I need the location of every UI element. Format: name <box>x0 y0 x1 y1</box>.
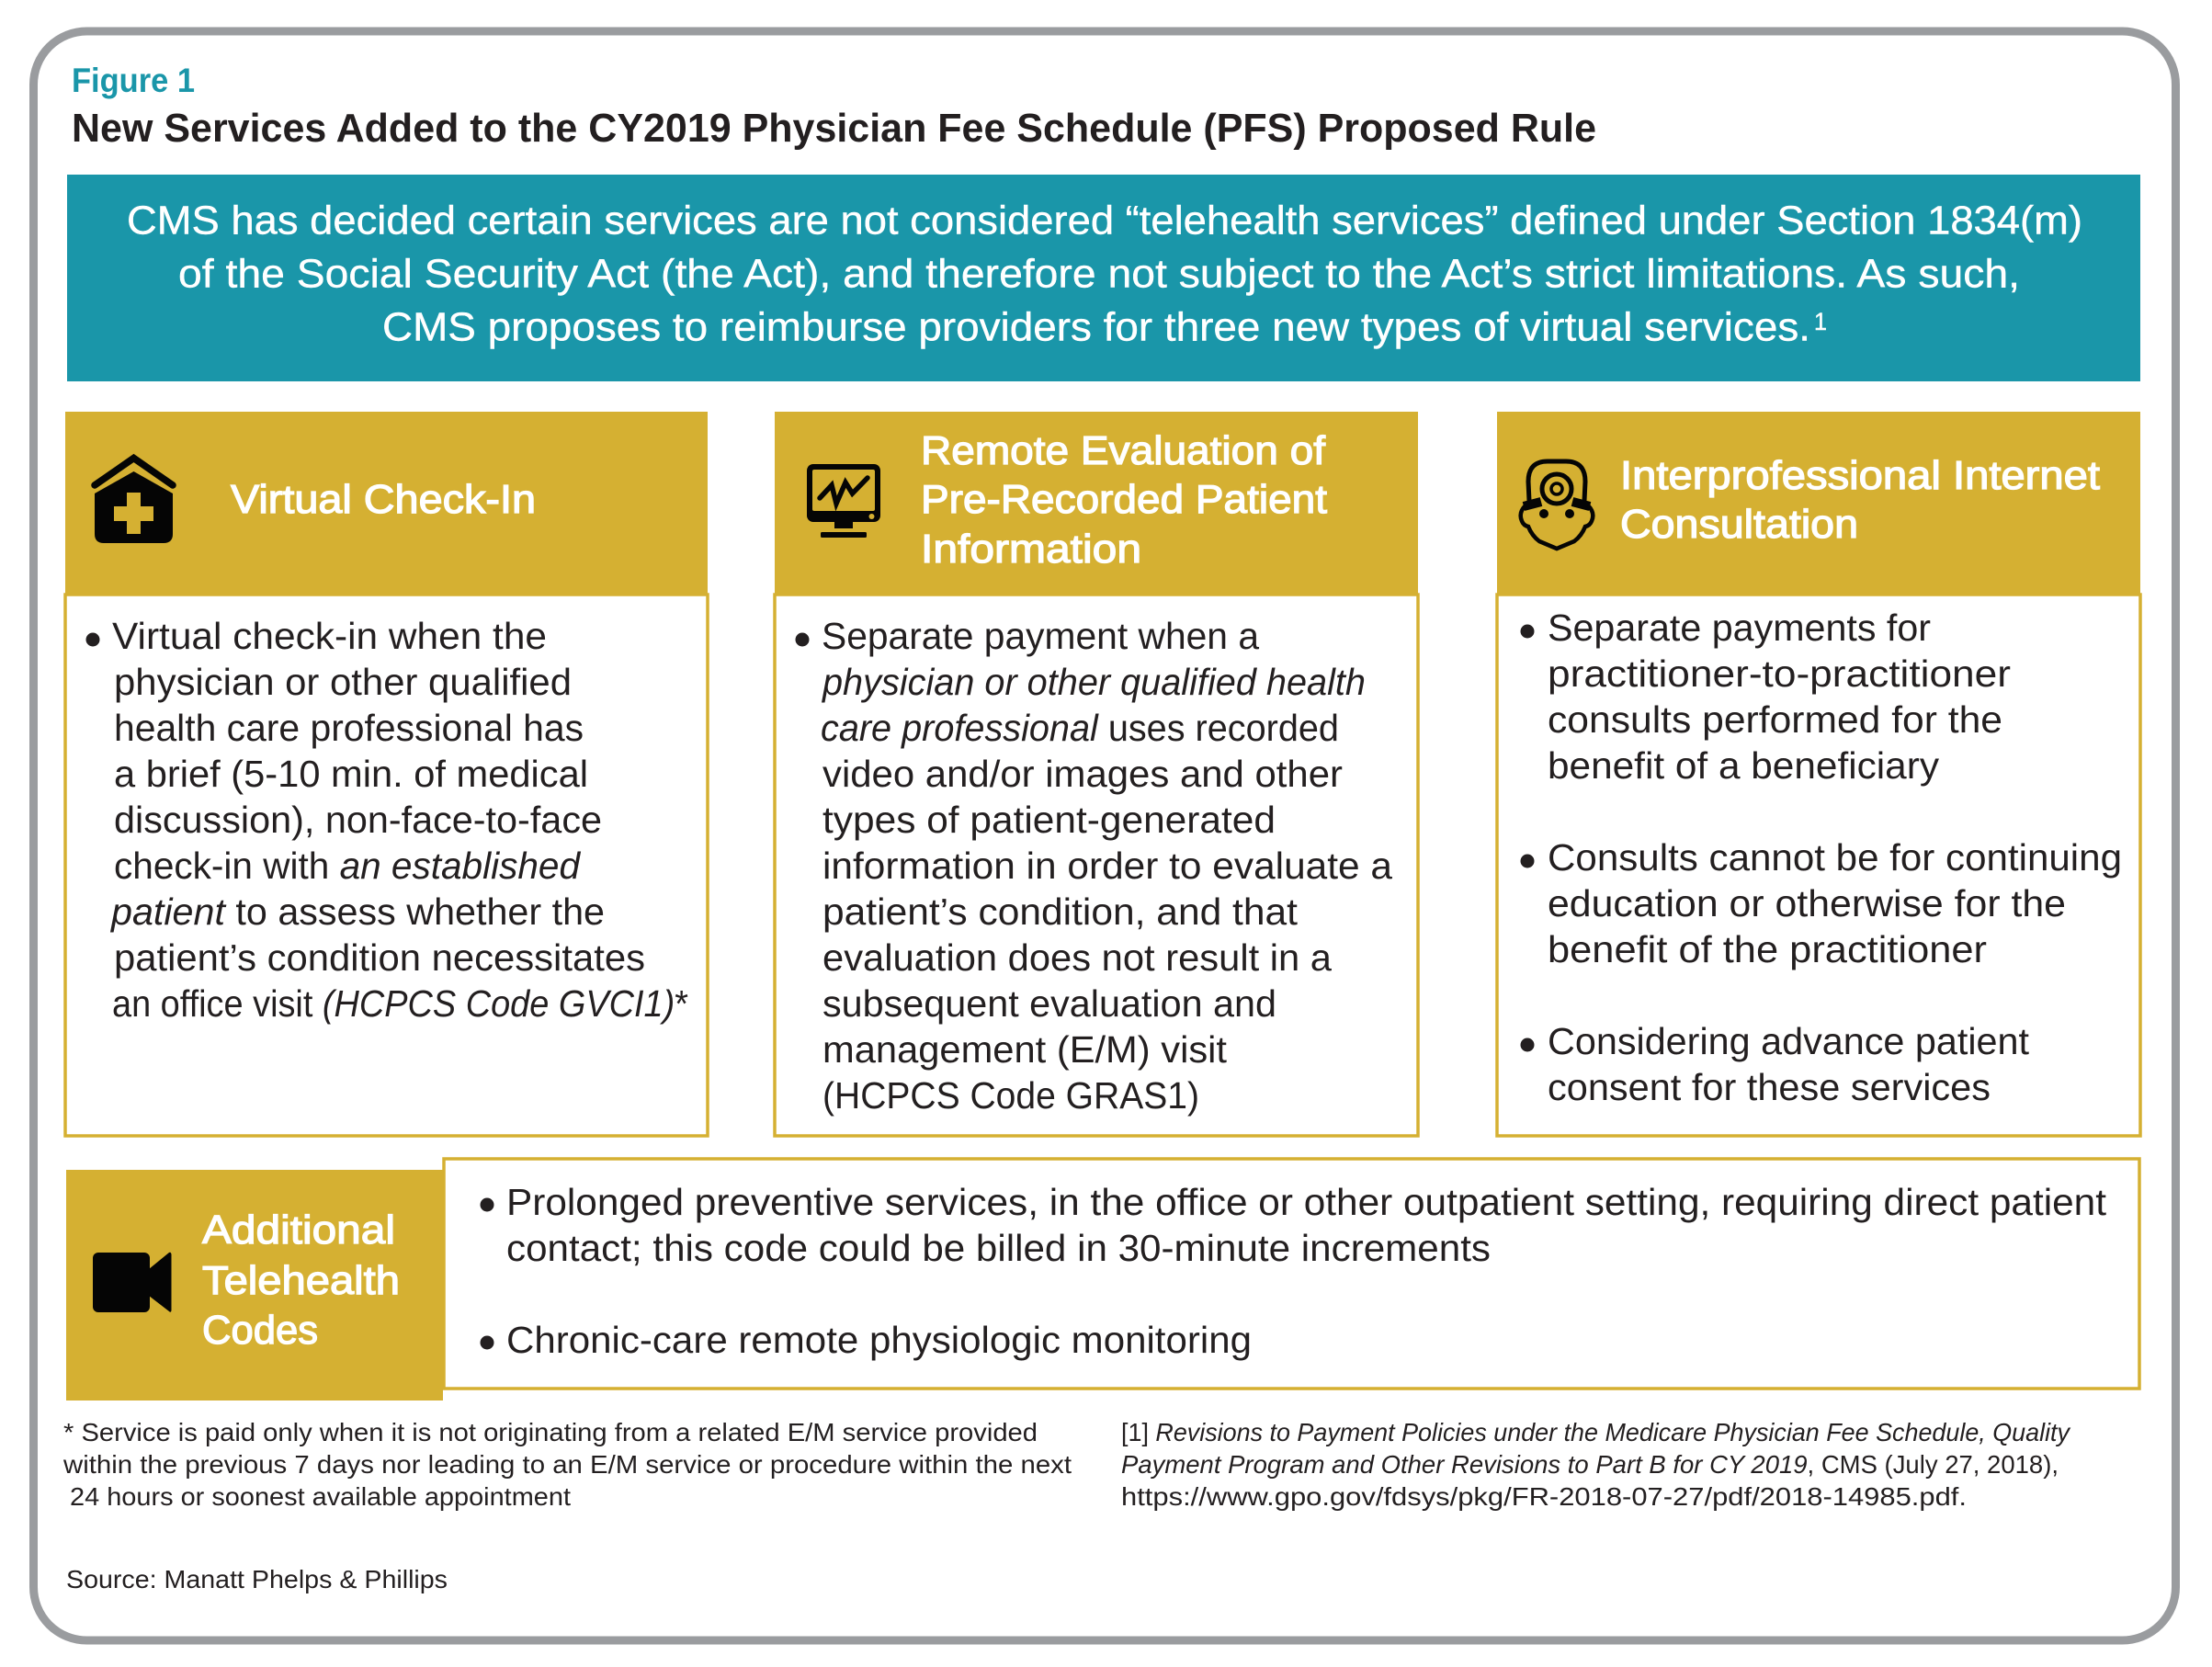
footnote: reference 1: [1] Revisions to Payment Policies under the Medicare Physician Fee Schedule, Quality <box>1121 1418 2071 1446</box>
column header bar <box>65 412 708 594</box>
bullet text: types of patient-generated <box>822 799 1276 841</box>
bullet text: Separate payment when a <box>822 615 1259 657</box>
panel: teal summary banner: CMS has decided certain services are not considered “telehealth services” defined under Section 1834(m) <box>127 198 2082 243</box>
icon: doctor with head mirror <box>1521 461 1593 549</box>
column header bar <box>775 412 1418 594</box>
bullet text: consent for these services <box>1548 1066 1991 1108</box>
footnote: asterisk note: 24 hours or soonest available appointment <box>70 1482 571 1511</box>
bullet text: evaluation does not result in a <box>822 936 1332 979</box>
column header bar <box>1497 412 2140 594</box>
additional codes bullets <box>480 1181 2107 1361</box>
bullet text: physician or other qualified health <box>821 661 1366 703</box>
bullet text: patient’s condition necessitates <box>114 936 645 979</box>
bullet text <box>86 615 688 1025</box>
footnote: reference 1 <box>1121 1418 2071 1511</box>
bullet text: video and/or images and other <box>822 753 1343 795</box>
figure label: Figure 1 <box>72 62 195 99</box>
bullet text: management (E/M) visit <box>822 1028 1228 1071</box>
bullet text: health care professional has <box>114 707 584 749</box>
bullet text: discussion), non-face-to-face <box>114 799 602 841</box>
bullet text: physician or other qualified <box>114 661 572 703</box>
bullet text: benefit of a beneficiary <box>1548 744 1940 787</box>
bullet text: patient to assess whether the <box>109 890 605 933</box>
bullet text: a brief (5-10 min. of medical <box>114 753 588 795</box>
additional codes header <box>66 1170 443 1401</box>
panel: Remote Evaluation <box>775 412 1418 1136</box>
bullet text: Separate payments for <box>1548 607 1931 649</box>
panel: teal summary banner: of the Social Security Act (the Act), and therefore not subject to the Act’s strict limitations. As such, <box>178 252 2020 296</box>
additional codes heading <box>202 1208 400 1353</box>
panel: Additional Telehealth Codes <box>66 1159 2139 1401</box>
additional codes bullets: Prolonged preventive services, in the office or other outpatient setting, requiring direct patient <box>506 1181 2107 1223</box>
additional codes text box <box>444 1159 2139 1389</box>
bullet text: subsequent evaluation and <box>822 982 1276 1025</box>
column heading: Interprofessional Internet <box>1620 453 2100 498</box>
bullet text: check-in with an established <box>114 845 581 887</box>
icon: house with medical cross <box>95 458 173 543</box>
bullet text: information in order to evaluate a <box>822 845 1392 887</box>
icon: monitor with chart line <box>807 464 880 538</box>
column heading: Consultation <box>1620 502 1858 547</box>
column heading: Information <box>921 527 1141 572</box>
bullet text: an office visit (HCPCS Code GVCI1)* <box>112 982 688 1025</box>
additional codes bullets: Chronic-care remote physiologic monitoring <box>506 1319 1252 1361</box>
panel: teal summary banner: 1 <box>1814 308 1827 335</box>
icon: video camera <box>93 1253 171 1312</box>
bullet text: education or otherwise for the <box>1548 882 2066 924</box>
footnote: asterisk note: * Service is paid only when it is not originating from a related E/M service provided <box>63 1418 1038 1446</box>
additional codes heading: Telehealth <box>202 1258 400 1303</box>
panel: teal summary banner <box>67 175 2140 381</box>
bullet text: benefit of the practitioner <box>1548 928 1987 970</box>
column body box <box>65 595 708 1136</box>
bullet text: consults performed for the <box>1548 698 2002 741</box>
bullet text <box>796 615 1392 1117</box>
panel: Virtual Check-In <box>65 412 708 1136</box>
additional codes heading: Codes <box>202 1308 318 1353</box>
column heading <box>921 428 1327 572</box>
footnote: asterisk note <box>62 1418 1072 1511</box>
additional codes heading: Additional <box>202 1208 395 1253</box>
column body box <box>1497 595 2140 1136</box>
bullet text: care professional uses recorded <box>821 707 1339 749</box>
bullet text: practitioner-to-practitioner <box>1548 652 2011 695</box>
column body box <box>775 595 1418 1136</box>
footnote: reference 1: Payment Program and Other Revisions to Part B for CY 2019, CMS (July 27, 2018), <box>1121 1450 2059 1479</box>
panel: teal summary banner: CMS proposes to reimburse providers for three new types of virtual services. <box>382 305 1810 349</box>
bullet text: Consults cannot be for continuing <box>1548 836 2122 879</box>
footnote: reference 1: https://www.gpo.gov/fdsys/pkg/FR-2018-07-27/pdf/2018-14985.pdf. <box>1121 1482 1967 1511</box>
column heading: Pre-Recorded Patient <box>921 477 1327 522</box>
additional codes bullets: contact; this code could be billed in 30-minute increments <box>506 1227 1491 1269</box>
column heading: Remote Evaluation of <box>921 428 1326 473</box>
bullet text <box>1520 607 2122 1108</box>
bullet text: Virtual check-in when the <box>112 615 547 657</box>
bullet text: patient’s condition, and that <box>822 890 1299 933</box>
panel: Interprofessional Internet Consultation <box>1497 412 2140 1136</box>
source line: Source: Manatt Phelps & Phillips <box>66 1565 448 1593</box>
bullet text: Considering advance patient <box>1548 1020 2030 1062</box>
column heading: Virtual Check-In <box>231 477 536 522</box>
footnote: asterisk note: within the previous 7 days nor leading to an E/M service or procedure within the next <box>62 1450 1072 1479</box>
title: New Services Added to the CY2019 Physician Fee Schedule (PFS) Proposed Rule <box>72 106 1596 151</box>
bullet text: (HCPCS Code GRAS1) <box>822 1074 1199 1117</box>
column heading <box>1620 453 2100 547</box>
